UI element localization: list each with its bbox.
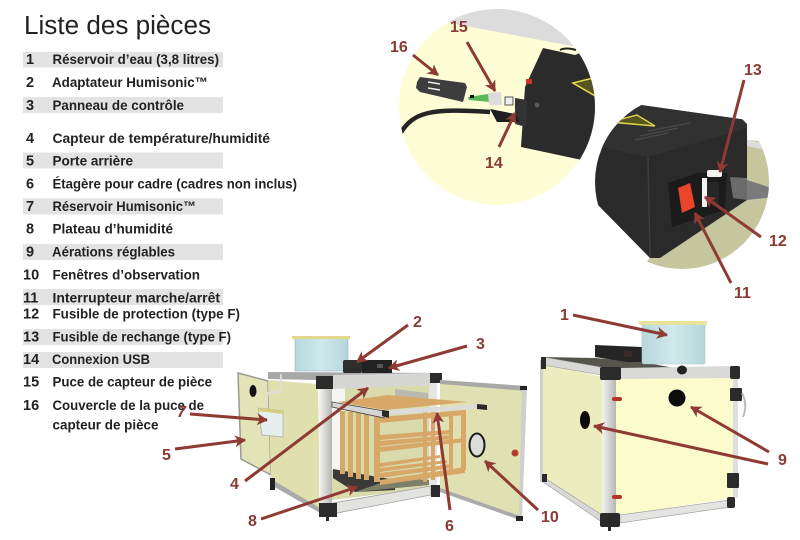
detail circle: sensor and USB connection (399, 5, 600, 205)
parts list: Porte arrière (52, 152, 133, 168)
observation window (470, 434, 484, 456)
callout numbers: 6 (445, 518, 454, 535)
rear incubator (540, 321, 745, 531)
parts list (23, 51, 297, 432)
parts list: Adaptateur Humisonic™ (52, 74, 208, 90)
parts list: Connexion USB (52, 351, 150, 367)
silver frame posts and beams (319, 388, 332, 504)
silver frame (540, 357, 742, 531)
title: Liste des pièces (24, 12, 211, 40)
vent openings (580, 390, 686, 429)
front incubator with door open (238, 336, 527, 521)
parts list: Couvercle de la puce de (52, 397, 204, 413)
parts list: 14 (23, 352, 39, 368)
parts list: Panneau de contrôle (52, 97, 184, 113)
parts list: Fusible de rechange (type F) (52, 328, 231, 344)
red clips (612, 397, 622, 499)
top frame (268, 372, 442, 382)
parts list: Capteur de température/humidité (52, 130, 270, 146)
callout numbers: 16 (390, 39, 408, 56)
parts list: capteur de pièce (52, 416, 159, 432)
parts list: 12 (23, 306, 39, 322)
rear door (238, 373, 271, 475)
Humisonic adapter (343, 360, 362, 373)
parts list: Plateau d’humidité (52, 220, 173, 236)
callout numbers: 13 (744, 62, 762, 79)
callout numbers: 11 (734, 285, 751, 302)
arrows (175, 42, 769, 519)
callout numbers: 5 (162, 447, 171, 464)
callout numbers: 8 (248, 513, 257, 530)
red latch (512, 450, 518, 456)
parts list: 9 (26, 244, 34, 260)
water tank (639, 321, 707, 364)
parts list: Étagère pour cadre (cadres non inclus) (52, 176, 297, 192)
parts list: 2 (26, 75, 34, 91)
handle (742, 393, 745, 417)
callout numbers: 14 (485, 155, 503, 172)
parts list: 10 (23, 268, 39, 284)
parts list: Aérations réglables (52, 244, 175, 260)
control panel (595, 345, 642, 362)
parts list: 13 (23, 330, 39, 346)
parts list: 16 (23, 398, 39, 414)
parts list: Réservoir Humisonic™ (52, 198, 196, 214)
parts list: Fusible de protection (type F) (52, 306, 240, 322)
parts list: 1 (26, 52, 34, 68)
frame shelf with wooden frames (338, 395, 468, 485)
Humisonic reservoir (258, 374, 283, 437)
parts list: Puce de capteur de pièce (52, 374, 212, 390)
parts list: 3 (26, 98, 34, 114)
callout numbers: 7 (177, 404, 187, 421)
water tank (292, 336, 350, 371)
front panel (616, 377, 733, 516)
parts list: 4 (26, 131, 34, 147)
callout numbers (162, 19, 787, 535)
interior (332, 385, 430, 500)
callout numbers: 2 (413, 314, 422, 331)
callout numbers: 1 (560, 307, 569, 324)
parts list: 6 (26, 176, 34, 192)
callout numbers: 4 (230, 476, 239, 493)
control panel (362, 360, 392, 373)
open door (440, 380, 527, 521)
parts list: 7 (26, 199, 34, 215)
bracket behind rack (395, 389, 428, 399)
parts list: Fenêtres d’observation (52, 266, 200, 282)
detail circle: power switch and fuses (595, 105, 769, 269)
parts list: 8 (26, 222, 34, 238)
callout numbers: 9 (778, 452, 787, 469)
callout numbers: 10 (541, 509, 559, 526)
parts list: Interrupteur marche/arrêt (52, 290, 220, 306)
cabinet side panel (268, 380, 320, 512)
side panel (542, 362, 602, 517)
parts list: Réservoir d’eau (3,8 litres) (52, 51, 219, 67)
parts list: 5 (26, 154, 34, 170)
parts list: 15 (23, 374, 39, 390)
callout numbers: 3 (476, 336, 485, 353)
parts list: 11 (23, 290, 38, 306)
callout numbers: 12 (769, 233, 787, 250)
black corner blocks (316, 373, 442, 521)
callout numbers: 15 (450, 19, 468, 36)
